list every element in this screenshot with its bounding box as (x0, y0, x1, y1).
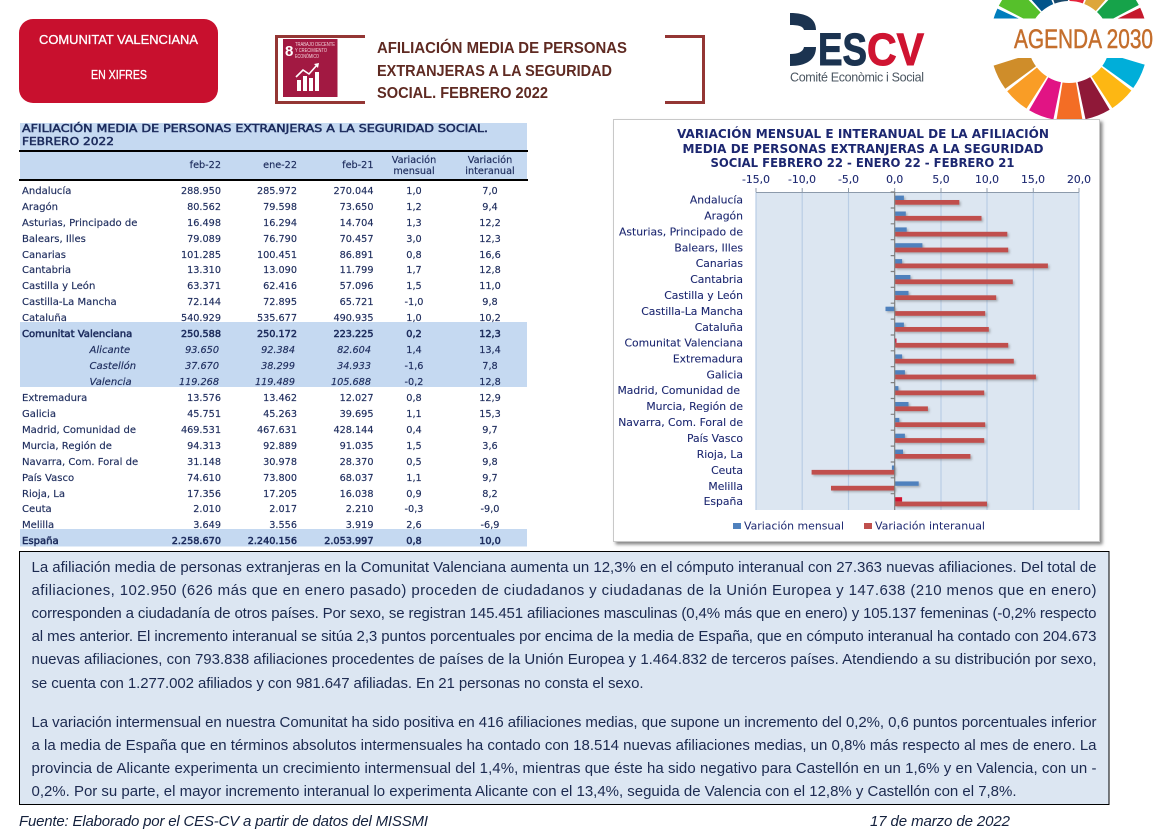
row: Madrid: 467.631 (257, 425, 297, 436)
row: Cantabria: 13.090 (263, 265, 297, 276)
row: País Vasco: 73.800 (263, 473, 297, 484)
title text: SOCIAL. FEBRERO 2022 (377, 85, 548, 102)
row: Alicante: 92.384 (261, 345, 295, 356)
row: Melilla: 3.649 (193, 520, 221, 531)
chart title: VARIACIÓN MENSUAL E INTERANUAL DE LA AFILIACIÓN (677, 126, 1049, 141)
row: Galicia: 39.695 (340, 409, 374, 420)
row: País Vasco: 1,1 (406, 473, 422, 484)
row: Andalucía (22, 185, 498, 197)
row: Andalucía: 270.044 (333, 186, 374, 197)
row: Alicante: 82.604 (337, 345, 371, 356)
axis tick labels: 10,0 (975, 173, 999, 186)
paragraph 1: se cuenta con 1.277.002 afiliados y con 981.647 afiliadas. En 21 personas no consta el sexo. (32, 675, 644, 692)
category labels: Balears, Illes (674, 242, 743, 254)
axis tick labels (742, 173, 1091, 186)
row: Valencia: 105.688 (331, 377, 371, 388)
row: Aragón: Aragón (22, 201, 58, 213)
row: Alicante: 93.650 (185, 345, 219, 356)
row: Asturias: 16.498 (187, 218, 221, 229)
row: Canarias: 100.451 (257, 250, 297, 261)
row: Comunitat Valenciana (22, 329, 501, 340)
row: Extremadura: 12,9 (479, 393, 501, 404)
row: Castilla-La Mancha: Castilla-La Mancha (22, 297, 117, 308)
row: Extremadura: Extremadura (22, 393, 87, 404)
row: Madrid: 469.531 (181, 425, 221, 436)
row: Castilla y León (22, 280, 501, 292)
logo: CES-CV: CV (867, 24, 924, 75)
row: Cataluña: 1,0 (406, 313, 422, 324)
row: Melilla (22, 520, 499, 531)
row: Andalucía: 288.950 (181, 186, 221, 197)
bars: variación interanual (812, 200, 1048, 506)
axis tick labels: -15,0 (742, 173, 770, 186)
category labels: Rioja, La (697, 448, 743, 461)
row: País Vasco: 9,7 (482, 473, 498, 484)
row: Comunitat Valenciana: 0,2 (406, 329, 422, 340)
category labels: Madrid, Comunidad de (617, 384, 740, 397)
row: España (22, 536, 501, 547)
category labels: Castilla y León (664, 289, 743, 302)
row: Balears: 79.089 (187, 234, 221, 245)
row: Melilla: -6,9 (481, 520, 499, 531)
paragraph 2: La variación intermensual en nuestra Comunitat ha sido positiva en 416 afiliaciones medias, que supone un incremento del 0,2%, 0,6 puntos porcentuales inferior (32, 714, 1096, 731)
row: España: 0,8 (406, 536, 422, 547)
row: Comunitat Valenciana: 250.172 (257, 329, 297, 340)
icon: SDG 8 decent work: 8 (285, 43, 293, 60)
row: Ceuta: -9,0 (481, 504, 499, 515)
row: Ceuta: -0,3 (405, 504, 423, 515)
title text: EXTRANJERAS A LA SEGURIDAD (377, 63, 612, 80)
title text (377, 39, 627, 102)
category labels: Canarias (696, 257, 743, 270)
row: Murcia: Murcia, Región de (22, 440, 112, 452)
table column headers: feb-22 (190, 160, 221, 171)
category labels (617, 194, 743, 508)
row: Melilla: 3.556 (269, 520, 297, 531)
row: Galicia: 45.751 (187, 409, 221, 420)
table column headers (190, 154, 515, 177)
row: Navarra: Navarra, Com. Foral de (22, 457, 138, 468)
row: Aragón: 1,2 (406, 202, 422, 213)
row: Murcia: 1,5 (406, 441, 422, 452)
row: Castellón: Castellón (90, 360, 136, 372)
category labels: Castilla-La Mancha (641, 305, 743, 318)
row: Castilla-La Mancha: -1,0 (405, 297, 423, 308)
row: Balears (22, 234, 501, 245)
row: Andalucía: 285.972 (257, 186, 297, 197)
table heading (22, 122, 488, 148)
row: Alicante: Alicante (88, 345, 130, 356)
row: Canarias: 101.285 (181, 250, 221, 261)
table heading: FEBRERO 2022 (22, 136, 114, 148)
axis tick labels: 5,0 (932, 173, 950, 186)
row: Ceuta: 2.010 (193, 504, 221, 515)
row: Cantabria (22, 265, 501, 276)
paragraph 1: afiliaciones, 102.950 (626 más que en enero pasado) proceden de ciudadanos y ciudadanas de la Unión Europea y 147.638 (210 menos que en enero) (32, 582, 1097, 599)
paragraph 1: nuevas afiliaciones, con 793.838 afiliaciones procedentes de países de la Unión Europea y 1.464.832 de terceros países. Atendiendo a su distribución por sexo, (32, 651, 1096, 668)
paragraph 2 (32, 714, 1097, 800)
panel: commentary text (20, 552, 1109, 804)
row: País Vasco (22, 472, 498, 484)
row: Galicia: 45.263 (263, 409, 297, 420)
row: Cataluña: 540.929 (181, 313, 221, 324)
row: Rioja: 0,9 (406, 489, 422, 500)
vertical zero axis (891, 192, 895, 510)
badge: Comunitat Valenciana en xifres (19, 19, 218, 103)
row: Galicia: 1,1 (406, 409, 422, 420)
row: Madrid: Madrid, Comunidad de (22, 425, 136, 436)
row: Castellón: 38.299 (261, 361, 295, 372)
row: Castilla-La Mancha: 72.144 (187, 297, 221, 308)
badge: Comunitat Valenciana en xifres: EN XIFRES (91, 67, 147, 82)
row: Castilla-La Mancha: 72.895 (263, 297, 297, 308)
row: Canarias: 86.891 (340, 250, 374, 261)
row: Valencia (90, 377, 501, 388)
row: España: 10,0 (479, 536, 501, 547)
chart title: MEDIA DE PERSONAS EXTRANJERAS A LA SEGURIDAD (682, 142, 1044, 156)
row: Melilla: 3.919 (346, 520, 374, 531)
row: Navarra: 31.148 (187, 457, 221, 468)
category labels: Cantabria (690, 273, 743, 286)
row: Castellón: 34.933 (337, 361, 371, 372)
axis tick labels: 0,0 (886, 173, 903, 186)
row: Murcia (22, 440, 498, 452)
row: Canarias (22, 250, 501, 261)
row: Valencia: 12,8 (479, 377, 501, 388)
category labels: España (704, 495, 743, 508)
axis tick labels: -5,0 (838, 173, 859, 186)
legend: Variación interanual (875, 520, 985, 532)
icon: SDG 8 decent work: Y CRECIMIENTO (295, 48, 327, 54)
row: Cataluña: 490.935 (333, 313, 374, 324)
row: Castilla y León: 63.371 (187, 281, 221, 292)
row: Balears: 12,3 (479, 234, 501, 245)
row: Cantabria: Cantabria (22, 265, 71, 276)
row: Aragón: 80.562 (187, 202, 221, 213)
table heading: AFILIACIÓN MEDIA DE PERSONAS EXTRANJERAS A LA SEGURIDAD SOCIAL. (22, 122, 488, 135)
row: Galicia: Galicia (22, 409, 56, 420)
row: Asturias: Asturias, Principado de (22, 218, 137, 229)
row: Asturias: 12,2 (479, 218, 501, 229)
row: Madrid: 0,4 (406, 425, 422, 436)
title frame with SDG 8 icon (276, 36, 704, 102)
row: Aragón: 79.598 (263, 202, 297, 213)
plot area (756, 188, 1079, 510)
axis tick labels: -10,0 (788, 173, 816, 186)
paragraph 1: La afiliación media de personas extranjeras en la Comunitat Valenciana aumenta un 12,3% en el cómputo interanual con 27.363 nuevas afiliaciones. Del total de (32, 559, 1096, 576)
row: Valencia: -0,2 (405, 377, 423, 388)
legend: Variación mensual (744, 520, 844, 532)
category labels: Cataluña (695, 321, 743, 334)
row: España: 2.240.156 (248, 536, 297, 547)
row: Madrid: 9,7 (482, 425, 498, 436)
row: Balears: Balears, Illes (22, 234, 86, 245)
paragraph 2: 0,2%. Por su parte, el mayor incremento interanual lo experimenta Alicante con el 13,4%, seguida de Valencia con el 12,8% y Castellón con el 7,8%. (32, 783, 1016, 800)
row: Balears: 70.457 (340, 234, 374, 245)
row: Navarra: 9,8 (482, 457, 498, 468)
category labels: Murcia, Región de (646, 400, 743, 413)
logo: CES-CV: ES (818, 24, 867, 75)
row: Asturias: 16.294 (263, 218, 297, 229)
category labels: Extremadura (673, 352, 743, 366)
row: Ceuta: 2.210 (346, 504, 374, 515)
icon: SDG 8 decent work: ECONÓMICO (295, 53, 319, 60)
row: Alicante (88, 345, 501, 356)
bars: variación mensual (886, 196, 922, 486)
row: País Vasco: País Vasco (22, 472, 74, 484)
row: Madrid: 428.144 (333, 425, 374, 436)
row: Valencia: Valencia (90, 377, 132, 388)
row: País Vasco: 68.037 (340, 473, 374, 484)
row: Comunitat Valenciana: 12,3 (479, 329, 501, 340)
row: Galicia (22, 409, 501, 420)
row: Melilla: Melilla (22, 520, 54, 531)
row: Castilla y León: 1,5 (406, 281, 422, 292)
row: Rioja: 16.038 (340, 489, 374, 500)
row: Cataluña (22, 313, 501, 324)
row: Galicia: 15,3 (479, 409, 501, 420)
row: España: 2.053.997 (324, 536, 374, 547)
row: Asturias (22, 218, 501, 229)
row: España: 2.258.670 (172, 536, 221, 547)
icon: SDG 8 decent work: TRABAJO DECENTE (295, 42, 336, 48)
row: Melilla: 2,6 (406, 520, 422, 531)
row: Valencia: 119.489 (255, 377, 295, 388)
row: Cataluña: 535.677 (257, 313, 297, 324)
row: Asturias: 1,3 (406, 218, 422, 229)
row: Comunitat Valenciana: Comunitat Valenciana (22, 329, 132, 340)
row: Canarias: 16,6 (479, 250, 501, 261)
table column headers: interanual (465, 166, 515, 177)
row: Alicante: 1,4 (406, 345, 422, 356)
table column headers: Variación (392, 154, 436, 166)
row: Balears: 76.790 (263, 234, 297, 245)
row: Andalucía: 7,0 (482, 186, 498, 197)
row: Andalucía: Andalucía (22, 185, 71, 197)
row: País Vasco: 74.610 (187, 473, 221, 484)
row: Castilla-La Mancha: 65.721 (340, 297, 374, 308)
row: Cantabria: 11.799 (340, 265, 374, 276)
row: Ceuta: Ceuta (22, 504, 52, 515)
icon: SDG 8 decent work (283, 39, 338, 97)
row: Cantabria: 12,8 (479, 265, 501, 276)
category labels: Navarra, Com. Foral de (618, 416, 743, 429)
row: Murcia: 3,6 (482, 441, 498, 452)
row: Madrid (22, 425, 498, 436)
category labels: Aragón (704, 210, 743, 222)
table column headers: mensual (393, 166, 435, 177)
row: Castellón: 37.670 (185, 361, 219, 372)
paragraph 2: a la media de España que en términos absolutos intermensuales ha contado con 18.514 nuevas afiliaciones medias, un 0,8% más respecto al mes de enero. La (32, 737, 1097, 754)
logo: CES-CV: Comité Econòmic i Social (790, 70, 924, 84)
paragraph 2: provincia de Alicante experimenta un crecimiento intermensual del 1,4%, mientras que éste ha sido negativo para Castellón en un 1,6% y en Valencia, con un - (32, 760, 1096, 777)
category labels: País Vasco (687, 432, 743, 445)
row: Comunitat Valenciana: 250.588 (181, 329, 221, 340)
row: Alicante: 13,4 (479, 345, 501, 356)
logo: CES-CV (790, 13, 924, 84)
row: Murcia: 94.313 (187, 441, 221, 452)
row: España: España (22, 536, 59, 547)
category labels: Melilla (708, 480, 743, 493)
row: Canarias: 0,8 (406, 250, 422, 261)
row: Aragón: 73.650 (340, 202, 374, 213)
row: Rioja: 8,2 (482, 489, 498, 500)
row: Castellón: 7,8 (482, 361, 498, 372)
row: Murcia: 91.035 (340, 441, 374, 452)
table column headers: ene-22 (263, 160, 297, 171)
row: Rioja: 17.205 (263, 489, 297, 500)
axis tick labels: 15,0 (1021, 173, 1045, 186)
row: Ceuta: 2.017 (269, 504, 297, 515)
row: Ceuta (22, 504, 499, 515)
category labels: Asturias, Principado de (619, 226, 743, 238)
row: Aragón (22, 201, 498, 213)
row: Cataluña: 10,2 (479, 313, 501, 324)
row: Navarra: 30.978 (263, 457, 297, 468)
row: Canarias: Canarias (22, 250, 66, 261)
row: Rioja (22, 489, 498, 500)
row: Castellón: -1,6 (405, 361, 423, 372)
row: Extremadura: 0,8 (406, 393, 422, 404)
row: Asturias: 14.704 (340, 218, 374, 229)
table column headers: feb-21 (342, 160, 374, 171)
chart title (677, 126, 1049, 170)
row: Castilla y León: 62.416 (263, 281, 297, 292)
row: Murcia: 92.889 (263, 441, 297, 452)
panel: bar chart (614, 120, 1100, 542)
logo: Agenda 2030 wheel (980, 0, 1158, 127)
legend (733, 520, 985, 532)
row: Cataluña: Cataluña (22, 313, 67, 324)
title text: AFILIACIÓN MEDIA DE PERSONAS (377, 39, 627, 57)
category labels: Comunitat Valenciana (624, 336, 743, 350)
row: Valencia: 119.268 (179, 377, 219, 388)
row: Castilla-La Mancha (22, 297, 498, 308)
row: Cantabria: 1,7 (406, 265, 422, 276)
row: Andalucía: 1,0 (406, 186, 422, 197)
paragraph 1 (32, 559, 1097, 692)
panel: data table (19, 122, 528, 547)
row: Rioja: 17.356 (187, 489, 221, 500)
chart title: SOCIAL FEBRERO 22 - ENERO 22 - FEBRERO 21 (710, 156, 1014, 170)
row: Castilla-La Mancha: 9,8 (482, 297, 498, 308)
axis tick labels: 20,0 (1067, 173, 1091, 186)
row: Balears: 3,0 (406, 234, 422, 245)
category labels: Ceuta (711, 464, 743, 477)
badge: Comunitat Valenciana en xifres: COMUNITAT VALENCIANA (39, 32, 198, 47)
category labels: Galicia (706, 368, 743, 382)
row: Castilla y León: 57.096 (340, 281, 374, 292)
table column headers: Variación (468, 154, 512, 166)
row: Navarra (22, 457, 498, 468)
row: Castilla y León: 11,0 (479, 281, 501, 292)
row: Comunitat Valenciana: 223.225 (333, 329, 374, 340)
row: Aragón: 9,4 (482, 202, 498, 213)
row: Cantabria: 13.310 (187, 265, 221, 276)
row: Extremadura: 13.576 (187, 393, 221, 404)
date: 17 de marzo de 2022 (870, 813, 1011, 830)
row: Castellón (90, 360, 498, 372)
paragraph 1: corresponden a ciudadanía de otros países. Por sexo, se registran 145.451 afiliaciones masculinas (0,4% más que en enero) y 105.137 femeninas (-0,2% respecto (32, 605, 1096, 622)
row: Extremadura: 12.027 (340, 393, 374, 404)
category labels: Andalucía (690, 194, 743, 206)
row: Navarra: 28.370 (340, 457, 374, 468)
paragraph 1: al mes anterior. El incremento interanual se sitúa 2,3 puntos porcentuales por encima de la media de España, que en cómputo interanual ha contado con 204.673 (32, 628, 1096, 645)
row: Navarra: 0,5 (406, 457, 422, 468)
row: Extremadura: 13.462 (263, 393, 297, 404)
row: Castilla y León: Castilla y León (22, 280, 95, 292)
row: Extremadura (22, 393, 501, 404)
row: Rioja: Rioja, La (22, 489, 65, 500)
source note: Fuente: Elaborado por el CES-CV a partir de datos del MISSMI (19, 813, 428, 830)
highlighted bars: Comunitat Valenciana and España (895, 338, 902, 502)
